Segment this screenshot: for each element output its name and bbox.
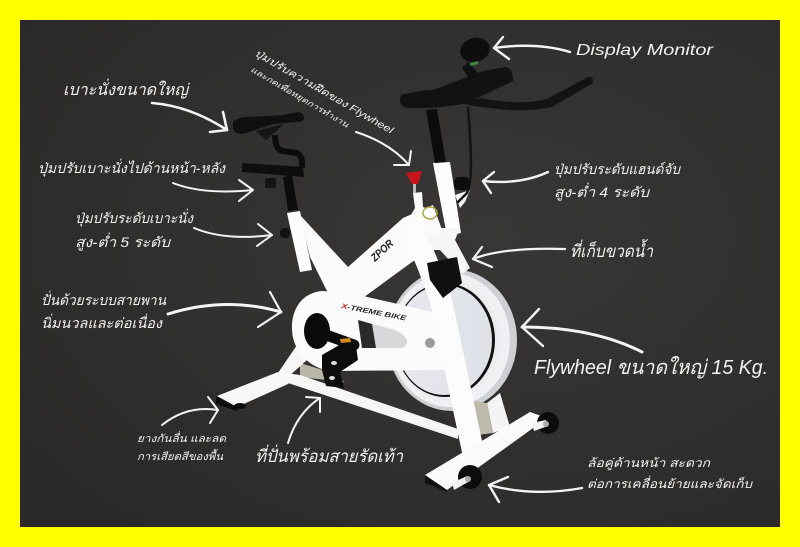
arrow: to saddle [152, 103, 227, 132]
handlebars [400, 67, 593, 110]
callout: bottle holder: ที่เก็บขวดน้ำ [570, 238, 653, 261]
callout: front wheels [489, 456, 754, 502]
callout: display monitor [494, 37, 714, 59]
callout: seat height adjustment: สูง-ต่ำ 5 ระดับ [75, 232, 171, 251]
main frame [287, 162, 474, 456]
callout: resistance knob: และกดเพื่อหยุดการทำงาน [248, 63, 352, 131]
callout: handlebar adjustment [483, 161, 681, 201]
chain guard [292, 291, 447, 371]
callout: seat height adjustment [75, 208, 272, 251]
callout: flywheel: Flywheel ขนาดใหญ่ 15 Kg. [534, 356, 768, 379]
arrow: to bottle holder [473, 247, 565, 267]
callout: large saddle: เบาะนั่งขนาดใหญ่ [63, 78, 190, 99]
brand mark: ZPOR [368, 238, 396, 265]
callout: pedal with strap: ที่ปั่นพร้อมสายรัดเท้า [255, 444, 403, 466]
arrow: to chain guard [168, 292, 281, 327]
arrow: to monitor [494, 37, 570, 59]
water bottle holder [427, 257, 462, 298]
illustration: exercise bike [216, 35, 593, 492]
frame badge [423, 207, 437, 219]
callout: bottle holder [473, 238, 653, 267]
callout: rubber feet: ยางกันลื่น และลด [137, 431, 227, 445]
arrow: to wheel [489, 477, 582, 502]
callout: belt drive: นิ่มนวลและต่อเนื่อง [41, 313, 163, 331]
arrow: to knob [356, 132, 411, 165]
callout: seat fore-aft adjustment: ปุ่มปรับเบาะนั่งไปด้านหน้า-หลัง [38, 158, 226, 177]
red resistance knob [406, 171, 422, 193]
front wheels [452, 412, 559, 490]
front foot end cap [425, 475, 447, 492]
callout: pedal with strap [255, 397, 403, 466]
callout: resistance knob: ปุ่มปรับความฝืดของ Flywheel [252, 47, 396, 137]
callout: belt drive: ปั่นด้วยระบบสายพาน [41, 290, 166, 308]
callout: handlebar adjustment: ปุ่มปรับระดับแฮนด์จับ [554, 161, 681, 178]
callout: large saddle [63, 78, 227, 132]
callout: belt drive [41, 290, 281, 331]
callout: front wheels: ล้อคู่ด้านหน้า สะดวก [587, 456, 711, 471]
saddle [233, 112, 304, 134]
callout: front wheels: ต่อการเคลื่อนย้ายและจัดเก็บ [587, 475, 754, 491]
handlebar post and cable [426, 107, 471, 203]
arrow: to rear foot [162, 397, 218, 425]
front stabilizer and base [216, 345, 510, 439]
arrow: to seat rail knob [173, 180, 253, 201]
arrow: to pedal [288, 397, 320, 443]
callout: rubber feet: การเสียดสีของพื้น [137, 448, 224, 463]
arrow: to seat post knob [194, 224, 272, 246]
arrow: to handlebar knob [483, 172, 548, 193]
callout: resistance knob [248, 47, 411, 165]
front foot bar [425, 412, 547, 490]
callout: seat height adjustment: ปุ่มปรับระดับเบาะนั่ง [75, 208, 194, 227]
flywheel [387, 269, 517, 411]
callout: handlebar adjustment: สูง-ต่ำ 4 ระดับ [554, 182, 650, 201]
guard label: X-TREME BIKE [339, 303, 407, 323]
callout: rubber feet [137, 397, 227, 463]
callout: display monitor: Display Monitor [576, 42, 714, 59]
callout: seat fore-aft adjustment [38, 158, 253, 201]
pedal and crank [318, 332, 358, 388]
seat post and knobs [242, 124, 304, 238]
arrow: to flywheel [522, 309, 642, 352]
display monitor [457, 35, 493, 80]
callout: flywheel [522, 309, 768, 379]
